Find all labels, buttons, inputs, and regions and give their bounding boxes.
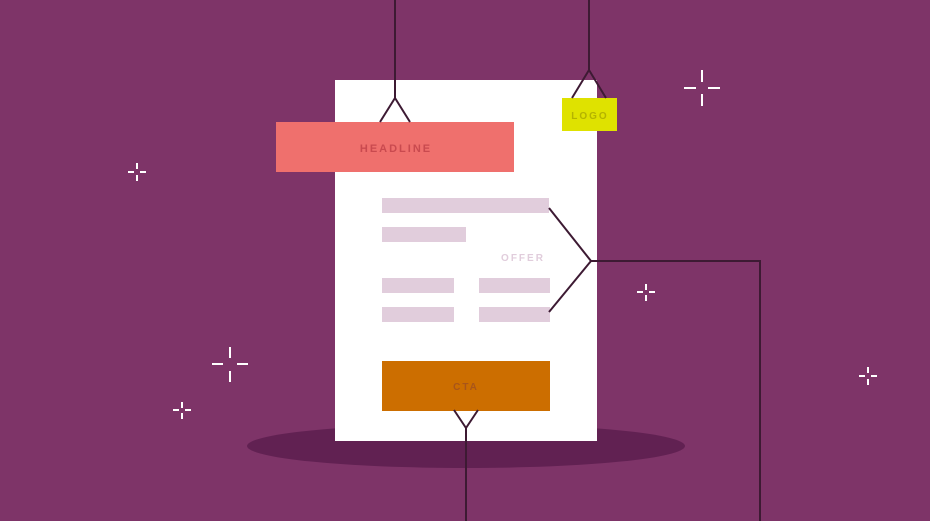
CTA button: CTA <box>453 382 479 393</box>
headline label block: HEADLINE <box>360 143 432 155</box>
headline label block <box>276 122 514 172</box>
sparkles <box>128 70 877 419</box>
connector lines <box>380 0 760 521</box>
logo label block: LOGO <box>571 111 609 122</box>
offer label: OFFER <box>501 253 545 264</box>
shadow <box>247 424 685 468</box>
page card <box>335 80 597 441</box>
logo label block <box>562 98 617 131</box>
offer lines <box>382 198 550 322</box>
CTA button <box>382 361 550 411</box>
